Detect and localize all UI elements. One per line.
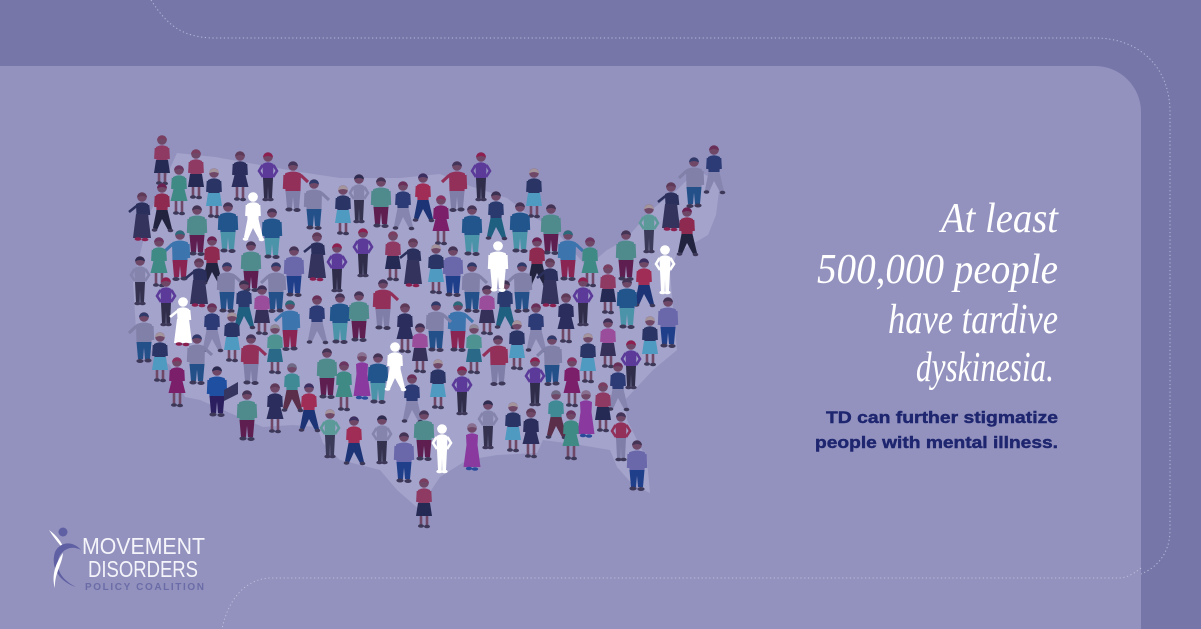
icon: briefcase	[224, 382, 238, 401]
logo text: DISORDERS	[88, 556, 198, 582]
highlighted figure: south	[433, 424, 451, 473]
logo text: POLICY COALITION	[85, 582, 204, 593]
logo text	[82, 533, 205, 593]
headline: dyskinesia.	[916, 345, 1054, 391]
headline: 500,000 people	[817, 247, 1058, 293]
headline	[817, 196, 1059, 391]
headline: At least	[938, 196, 1059, 242]
crowd of people forming the map	[129, 135, 725, 528]
subheading: people with mental illness.	[815, 434, 1058, 452]
logo: Movement Disorders Policy Coalition	[49, 528, 205, 593]
headline: have tardive	[888, 297, 1058, 343]
highlighted figure: midwest	[489, 241, 507, 292]
highlighted figure: west	[170, 297, 192, 346]
highlighted figure: northwest	[243, 192, 264, 241]
map of the United States	[133, 153, 720, 510]
subheading	[815, 409, 1058, 452]
highlighted figure: northeast	[656, 245, 674, 294]
highlighted figure: central	[385, 342, 406, 391]
icon: dancing figure	[49, 528, 81, 588]
logo text: MOVEMENT	[82, 533, 205, 559]
subheading: TD can further stigmatize	[826, 409, 1058, 427]
dotted line lower section	[222, 568, 1141, 629]
